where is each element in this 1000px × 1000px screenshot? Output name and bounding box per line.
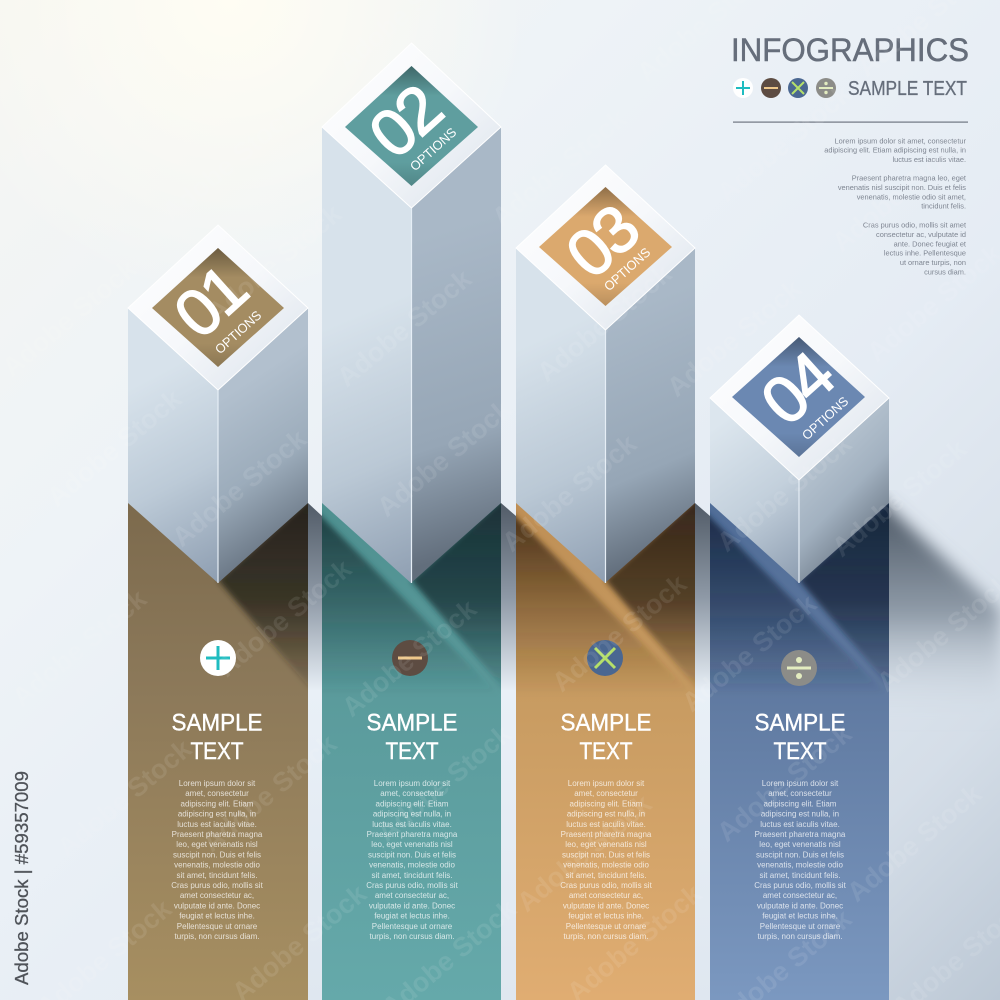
watermarks: Adobe Stock <box>711 718 858 848</box>
bar 3 body text: Praesent pharetra magna <box>561 830 652 839</box>
panel: column 1 bar <box>128 503 308 1000</box>
bar 3 body text <box>560 779 653 941</box>
legend minus <box>761 78 781 98</box>
bar 4 body text: leo, eget venenatis nisl <box>759 840 841 849</box>
bar 2 body text: adipiscing elit. Etiam <box>376 799 449 808</box>
bar 4 body text: Cras purus odio, mollis sit <box>754 881 847 890</box>
bar 4 heading <box>754 710 846 765</box>
bar 1 body text: Lorem ipsum dolor sit <box>179 779 256 788</box>
watermarks: Adobe Stock <box>826 128 973 258</box>
watermarks: Adobe Stock <box>486 103 633 233</box>
bar 1 body text: amet, consectetur <box>185 789 249 798</box>
header body text: luctus est iaculis vitae. <box>892 155 966 164</box>
bar 3 body text: vulputate id ante. Donec <box>563 901 649 910</box>
watermarks: Adobe Stock <box>841 778 988 908</box>
options label: OPTIONS <box>407 124 460 174</box>
bar 2 shadow wedge <box>408 503 501 688</box>
header body text: consectetur ac, vulputate id <box>876 230 966 239</box>
watermarks: Adobe Stock <box>826 433 973 563</box>
header body text: ante. Donec feugiat et <box>894 239 966 248</box>
bar 4 body text: turpis, non cursus diam. <box>758 932 842 941</box>
bar 2 body text: adipiscing est nulla, in <box>373 810 451 819</box>
bar 4 body text: Lorem ipsum dolor sit <box>762 779 839 788</box>
bar 3 body text: luctus est iaculis vitae. <box>566 820 646 829</box>
watermarks: Adobe Stock <box>201 198 348 328</box>
icon: minus <box>392 640 428 676</box>
bar 1 body text: Pellentesque ut ornare <box>177 922 258 931</box>
bar 1 shadow wedge <box>216 503 308 687</box>
bar 3 body text: amet, consectetur <box>574 789 638 798</box>
bar 2 body text: amet, consectetur <box>380 789 444 798</box>
bar 1 body text: feugiat et lectus inhe. <box>179 912 255 921</box>
watermarks: Adobe Stock <box>546 568 693 698</box>
bar 1 body text <box>171 779 264 941</box>
header body text: cursus diam. <box>924 268 966 276</box>
bar 1 heading <box>172 710 262 765</box>
header body text: venenatis nisl suscipit non. Duis et felis <box>838 183 966 192</box>
bar 4 body text <box>754 779 847 941</box>
icon: multiply <box>587 640 623 676</box>
bar 1 body text: adipiscing est nulla, in <box>178 810 256 819</box>
header body text: tincidunt felis. <box>921 202 966 211</box>
bar 3 body text: sit amet, tincidunt felis. <box>566 871 646 880</box>
watermarks: Adobe Stock <box>196 728 343 858</box>
3D block 02 <box>322 43 501 583</box>
bar 3 heading <box>560 710 652 765</box>
watermarks: Adobe Stock <box>371 718 518 848</box>
watermarks: Adobe Stock <box>336 593 483 723</box>
watermarks: Adobe Stock <box>676 588 823 718</box>
bar 2 body text: turpis, non cursus diam. <box>370 932 454 941</box>
icon: plus <box>200 640 236 676</box>
bar 1 body text: venenatis, molestie odio <box>174 861 260 870</box>
bar 2 left shadow <box>322 512 478 680</box>
watermarks: Adobe Stock <box>331 263 478 393</box>
bar 4 body text: amet, consectetur <box>768 789 832 798</box>
header body text: lectus inhe. Pellentesque <box>884 249 966 258</box>
watermarks: Adobe Stock <box>156 98 303 228</box>
watermarks: Adobe Stock <box>496 428 643 558</box>
bar 2 heading: TEXT <box>386 738 439 765</box>
legend plus <box>733 78 753 98</box>
title: INFOGRAPHICS <box>731 32 969 68</box>
3D block 01 <box>128 225 308 583</box>
bar 2 heading: SAMPLE <box>366 710 458 736</box>
bar 4 body text: adipiscing elit. Etiam <box>764 799 837 808</box>
watermarks: Adobe Stock <box>661 273 808 403</box>
bar 1 body text: vulputate id ante. Donec <box>174 901 260 910</box>
number 04: 04 <box>747 338 847 439</box>
bar 3 body text: suscipit non. Duis et felis <box>562 850 650 859</box>
watermarks: Adobe Stock <box>371 393 518 523</box>
bar 4 shadow wedge <box>797 503 889 686</box>
watermarks: Adobe Stock <box>166 423 313 553</box>
header body text: Cras purus odio, mollis sit amet <box>863 220 966 230</box>
watermarks: Adobe Stock <box>711 78 858 208</box>
watermarks: Adobe Stock <box>0 253 143 383</box>
legend multiply <box>788 78 808 98</box>
panel: column 2 bar <box>322 503 501 1000</box>
bar 3 body text: adipiscing est nulla, in <box>567 810 645 819</box>
bar 3 body text: Lorem ipsum dolor sit <box>568 779 645 788</box>
bar 1 body text: luctus est iaculis vitae. <box>177 820 257 829</box>
header rule <box>733 122 968 123</box>
bar 2 body text: luctus est iaculis vitae. <box>372 820 452 829</box>
bar 4 body text: luctus est iaculis vitae. <box>760 820 840 829</box>
bar 3 body text: feugiat et lectus inhe. <box>568 912 644 921</box>
bar 2 body text: leo, eget venenatis nisl <box>371 840 453 849</box>
bar 2 body text: Pellentesque ut ornare <box>372 922 453 931</box>
watermarks: Adobe Stock <box>11 43 158 173</box>
bar 3 left shadow <box>516 512 676 684</box>
stock id vertical text: Adobe Stock | #59357009 <box>12 771 32 985</box>
number 02: 02 <box>355 71 455 172</box>
bar 1 body text: leo, eget venenatis nisl <box>176 840 258 849</box>
bar 1 body text: turpis, non cursus diam. <box>175 932 259 941</box>
header body text: venenatis, molestie odio sit amet, <box>857 192 966 201</box>
options label: OPTIONS <box>799 393 852 443</box>
bar 3 body text: Cras purus odio, mollis sit <box>560 881 653 890</box>
gap shadows between columns <box>308 503 710 1000</box>
bar 2 body text: amet consectetur ac, <box>375 891 449 900</box>
legend divide <box>816 78 836 98</box>
bar 1 body text: amet consectetur ac, <box>180 891 254 900</box>
bar 3 body text: venenatis, molestie odio <box>563 861 649 870</box>
bar 4 body text: venenatis, molestie odio <box>757 861 843 870</box>
bar 2 body text: Lorem ipsum dolor sit <box>374 779 451 788</box>
options label: OPTIONS <box>212 307 265 357</box>
bar 3 heading: TEXT <box>580 738 633 765</box>
bar 4 body text: amet consectetur ac, <box>763 891 837 900</box>
3D block 03 <box>516 165 695 583</box>
watermarks: Adobe Stock <box>51 733 198 863</box>
bar 3 body text: Pellentesque ut ornare <box>566 922 647 931</box>
header body text: ut ornare turpis, non <box>900 258 966 267</box>
bar 1 heading: TEXT <box>190 738 244 765</box>
bar 2 body text: vulputate id ante. Donec <box>369 901 455 910</box>
bar 1 body text: Cras purus odio, mollis sit <box>171 881 264 890</box>
bar 2 body text: sit amet, tincidunt felis. <box>372 871 452 880</box>
watermarks: Adobe Stock <box>711 428 858 558</box>
bar 2 body text <box>366 779 459 941</box>
header body text: adipiscing elit. Etiam adipiscing est nulla, in <box>824 146 966 155</box>
subtitle: SAMPLE TEXT <box>848 78 967 100</box>
bar 3 body text: adipiscing elit. Etiam <box>570 799 643 808</box>
bar 2 body text: venenatis, molestie odio <box>369 861 455 870</box>
bar 2 body text: feugiat et lectus inhe. <box>374 912 450 921</box>
bar 2 body text: suscipit non. Duis et felis <box>368 850 456 859</box>
bar 4 body text: adipiscing est nulla, in <box>761 810 839 819</box>
bar 4 left shadow <box>710 512 871 684</box>
bar 3 body text: turpis, non cursus diam. <box>564 932 648 941</box>
bar 4 body text: suscipit non. Duis et felis <box>756 850 844 859</box>
bar 4 heading: SAMPLE <box>754 710 846 736</box>
bar 4 body text: vulputate id ante. Donec <box>757 901 843 910</box>
bar 1 body text: suscipit non. Duis et felis <box>173 850 261 859</box>
watermarks: Adobe Stock <box>211 553 358 683</box>
header body text: Praesent pharetra magna leo, eget <box>852 174 966 182</box>
watermarks: Adobe Stock <box>511 788 658 918</box>
bar 1 heading: SAMPLE <box>172 710 262 736</box>
number 03: 03 <box>552 191 652 292</box>
number 01: 01 <box>160 251 260 352</box>
bar 4 body text: Pellentesque ut ornare <box>760 922 841 931</box>
options label: OPTIONS <box>601 244 654 294</box>
header body text <box>824 136 967 276</box>
watermarks: Adobe Stock <box>41 383 188 513</box>
bar 4 heading: TEXT <box>774 738 827 765</box>
bar 4 body text: Praesent pharetra magna <box>755 830 846 839</box>
bar 2 body text: Cras purus odio, mollis sit <box>366 881 459 890</box>
watermarks: Adobe Stock <box>6 583 153 713</box>
panel: column 3 bar <box>516 503 695 1000</box>
long shadow right of column 4 <box>889 491 1000 686</box>
bar 3 body text: leo, eget venenatis nisl <box>565 840 647 849</box>
3D block 04 <box>710 315 889 583</box>
bar 1 body text: adipiscing elit. Etiam <box>181 799 254 808</box>
bar 1 body text: sit amet, tincidunt felis. <box>177 871 257 880</box>
bar 3 heading: SAMPLE <box>560 710 652 736</box>
bar 3 body text: amet consectetur ac, <box>569 891 643 900</box>
bar 2 heading <box>366 710 458 765</box>
bar 2 body text: Praesent pharetra magna <box>367 830 458 839</box>
bar 1 body text: Praesent pharetra magna <box>172 830 263 839</box>
header body text: Lorem ipsum dolor sit amet, consectetur <box>835 136 967 145</box>
panel: column 4 bar <box>710 503 889 1000</box>
bar 4 body text: feugiat et lectus inhe. <box>762 912 838 921</box>
icon: divide <box>781 650 817 686</box>
bar 3 shadow wedge <box>602 503 695 688</box>
legend icons <box>733 78 836 98</box>
bar 4 body text: sit amet, tincidunt felis. <box>760 871 840 880</box>
watermarks: Adobe Stock <box>531 258 678 388</box>
